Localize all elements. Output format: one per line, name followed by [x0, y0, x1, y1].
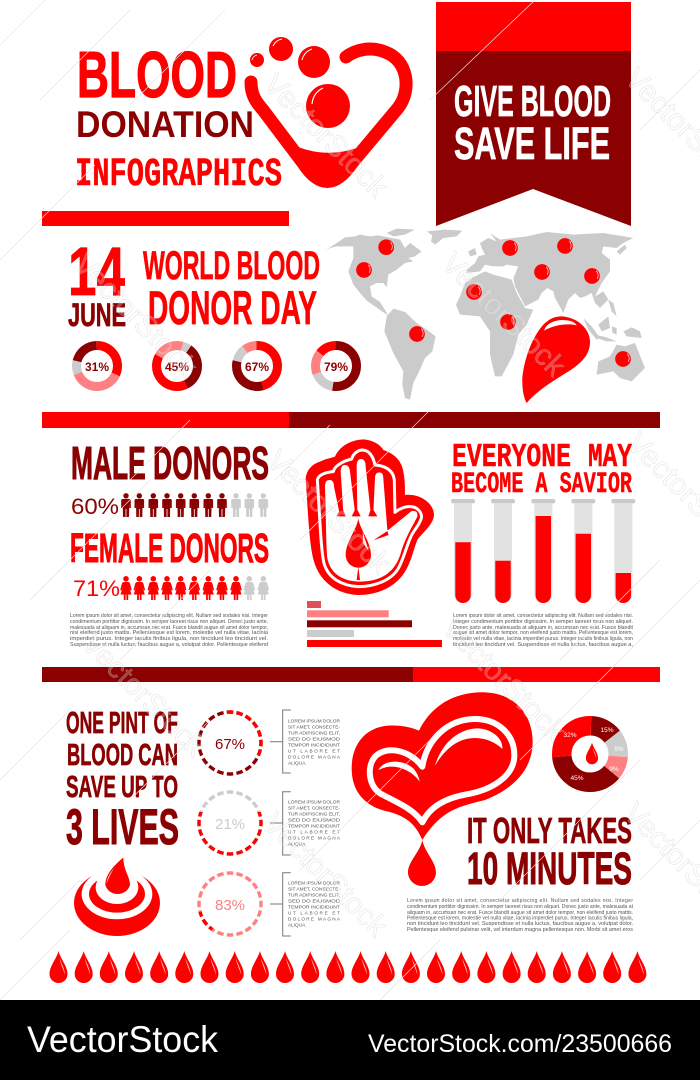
heading: world blood donor day: DONOR DAY: [148, 281, 317, 334]
icon: large heart with falling drop: [352, 692, 533, 886]
pie chart: 32% 15% 9% 9% 45%: 9%: [609, 766, 619, 773]
donut label: 79%: 79%: [324, 360, 348, 374]
donut label: 45%: 45%: [165, 360, 189, 374]
title: blood donation infographics: INFOGRAPHICS: [75, 153, 282, 198]
bracket text: third note: ALIQUA.: [288, 922, 306, 927]
pie chart: 32% 15% 9% 9% 45%: 32%: [563, 732, 577, 739]
footer: vectorstock credit: [0, 1000, 700, 1080]
bracket text: first note: ALIQUA.: [288, 760, 306, 765]
bracket text: first note: [270, 710, 341, 773]
icon: heart with blood bubbles: [250, 37, 406, 188]
bracket text: second note: ALIQUA.: [288, 841, 306, 846]
title: blood donation infographics: [75, 38, 282, 198]
icon: hand with blood drop: [306, 439, 434, 595]
text block: minutes lorem ipsum: [407, 898, 634, 933]
world map with pins: [325, 229, 645, 400]
text block: savior lorem ipsum: tincidunt leo tincidunt vel. Suspendisse et nulla luctus, faucibus augue a,: [453, 642, 633, 648]
bracket text: first note: LOREM IPSUM DOLOR: [288, 718, 341, 723]
divider bar: middle: [42, 412, 660, 428]
text: VectorStock: [67, 248, 204, 385]
text block: minutes lorem ipsum: Pellentesque eleifend pulvinar velit, vel interdum magna pellentesque non. Morbi sit amet eros: [407, 927, 634, 933]
text block: donors lorem ipsum: malesuada at aliquam in, accumsan nec erat. Fusce blandit augue sit amet dolor tempor,: [70, 625, 268, 631]
bracket text: second note: [270, 792, 341, 855]
heading: everyone may become a savior: [451, 439, 632, 502]
bracket text: third note: SED DO EIUSMOD: [288, 898, 341, 903]
bracket text: first note: SED DO EIUSMOD: [288, 736, 341, 741]
text: VectorStock: [435, 612, 572, 749]
text block: donors lorem ipsum: [70, 613, 268, 648]
progress ring: 21%: [199, 792, 261, 854]
chart: test tubes: [451, 499, 635, 603]
progress ring: 67%: [199, 712, 261, 774]
progress ring: 83%: 83%: [215, 897, 245, 914]
heading: everyone may become a savior: EVERYONE: [452, 439, 571, 476]
divider bar: top: [42, 211, 289, 226]
bracket text: second note: UT LABORE ET: [288, 829, 340, 834]
donut chart: 67%: [236, 346, 278, 386]
bracket text: first note: TEMPOR INCIDIDUNT: [288, 742, 340, 747]
heading: one pint of blood can save up to 3 lives: 3 LIVES: [66, 799, 179, 855]
bracket text: third note: DOLORE MAGNA: [288, 916, 341, 921]
icon: blood drop with ripples: [74, 857, 160, 936]
text block: donors lorem ipsum: imperdiet purus. Integer iaculis finibus ligula, non tincidunt leo tincidunt vel.: [70, 636, 268, 642]
text block: savior lorem ipsum: Lorem ipsum dolor sit amet, consectetur adipiscing elit. Nullam sed sodales nisi.: [453, 613, 633, 619]
ribbon banner: give blood save life: [436, 2, 631, 226]
heading: one pint of blood can save up to 3 lives: SAVE UP TO: [66, 769, 178, 804]
bracket text: second note: TUR ADIPISCING ELIT,: [288, 811, 340, 816]
heading: it only takes 10 minutes: [467, 810, 632, 894]
heading: one pint of blood can save up to 3 lives: BLOOD CAN: [67, 737, 178, 772]
heading: world blood donor day: [143, 244, 320, 334]
pie chart: 32% 15% 9% 9% 45%: 45%: [570, 775, 584, 782]
bracket text: second note: SIT AMET, CONSECTE-: [288, 805, 340, 810]
text: VectorStock: [257, 68, 394, 205]
bracket text: first note: TUR ADIPISCING ELIT,: [288, 730, 340, 735]
bracket text: third note: TUR ADIPISCING ELIT,: [288, 892, 340, 897]
divider bar: lower: [42, 667, 660, 682]
text: VectorStock: [75, 627, 212, 764]
title: blood donation infographics: BLOOD: [77, 38, 237, 111]
text block: minutes lorem ipsum: aliquam in, accumsan nec erat. Fusce blandit augue sit amet dolor tempor, non eleifend justo mattis.: [407, 910, 633, 916]
text block: donors lorem ipsum: nisi eleifend justo mattis. Pellentesque est lorem, molestie vel nulla vitae, lacinia: [70, 630, 268, 636]
text: VectorStock: [435, 247, 572, 384]
bracket text: third note: SIT AMET, CONSECTE-: [288, 886, 340, 891]
donut chart: 31%: [76, 346, 118, 386]
ribbon banner: give blood save life: SAVE LIFE: [454, 118, 610, 169]
pie chart: 32% 15% 9% 9% 45%: [562, 726, 624, 782]
footer: vectorstock credit: VectorStock.com/23500666: [368, 1030, 672, 1058]
bracket text: first note: SIT AMET, CONSECTE-: [288, 724, 340, 729]
bracket text: second note: SED DO EIUSMOD: [288, 817, 341, 822]
text block: savior lorem ipsum: augue sit amet dolor tempor, non eleifend justo mattis. Pellentesque est lorem,: [453, 630, 633, 636]
progress ring: 21%: 21%: [215, 816, 245, 833]
pie chart: 32% 15% 9% 9% 45%: 9%: [614, 746, 624, 753]
date: 14 june: [68, 233, 126, 333]
bracket text: third note: TEMPOR INCIDIDUNT: [288, 904, 340, 909]
text block: savior lorem ipsum: [453, 613, 634, 648]
heading: world blood donor day: WORLD BLOOD: [143, 244, 320, 288]
bracket text: third note: LOREM IPSUM DOLOR: [288, 880, 341, 885]
text block: donors lorem ipsum: Lorem ipsum dolor sit amet, consectetur adipiscing elit. Nullam sed sodales nisi. Integer: [70, 613, 268, 619]
text block: minutes lorem ipsum: Lorem ipsum dolor sit amet, consectetur adipiscing elit. Nullam sed sodales nisi. Integer: [407, 898, 633, 904]
donut chart: 79%: [316, 346, 356, 386]
panel: female donors: FEMALE DONORS: [70, 525, 269, 571]
progress ring: 67%: 67%: [215, 736, 245, 753]
bracket text: second note: DOLORE MAGNA: [288, 835, 341, 840]
bracket text: first note: DOLORE MAGNA: [288, 754, 341, 759]
heading: one pint of blood can save up to 3 lives: ONE PINT OF: [66, 705, 178, 740]
text: VectorStock: [257, 807, 394, 944]
bracket text: second note: LOREM IPSUM DOLOR: [288, 799, 341, 804]
text block: savior lorem ipsum: molestie vel nulla vitae, lacinia imperdiet purus. Integer iaculis finibus ligula, non: [453, 636, 633, 642]
bracket text: third note: UT LABORE ET: [288, 910, 340, 915]
bracket text: second note: TEMPOR INCIDIDUNT: [288, 823, 340, 828]
text block: donors lorem ipsum: condimentum porttitor dignissim. In semper laoreet risus non aliquet. Donec justo ante,: [70, 619, 268, 625]
donut label: 67%: 67%: [245, 360, 269, 374]
panel: male donors: 60%: [71, 494, 119, 519]
bar chart: horizontal bars: [307, 601, 442, 647]
heading: one pint of blood can save up to 3 lives: [66, 705, 179, 855]
text block: savior lorem ipsum: Donec justo ante, malesuada at aliquam in, accumsan nec erat. Fusce blandit: [453, 625, 634, 631]
text block: savior lorem ipsum: Integer condimentum porttitor dignissim. In semper laoreet risus non aliquet.: [453, 619, 633, 625]
donut label: 31%: 31%: [85, 360, 109, 374]
text block: minutes lorem ipsum: condimentum porttitor dignissim. In semper laoreet risus non aliquet. Donec justo ante, malesuada at: [407, 904, 634, 910]
text: VectorStock: [260, 444, 397, 581]
text block: minutes lorem ipsum: Pellentesque est lorem, molestie vel nulla vitae, lacinia imperdiet purus. Integer iaculis finibus ligula,: [407, 916, 633, 922]
donut chart: 45%: [156, 346, 198, 386]
icon: large blood drop on map: [522, 316, 590, 403]
date: 14 june: 14: [68, 233, 125, 310]
panel: male donors: MALE DONORS: [71, 437, 269, 489]
text block: minutes lorem ipsum: non tincidunt leo tincidunt vel. Suspendisse et nulla luctus, faucibus augue a, volutpat dolor.: [407, 921, 633, 927]
title: blood donation infographics: DONATION: [76, 104, 254, 145]
panel: female donors: 71%: [73, 576, 120, 601]
footer: vectorstock credit: VectorStock: [27, 1019, 218, 1060]
panel: male donors: [71, 437, 269, 519]
date: 14 june: JUNE: [68, 297, 126, 333]
bracket text: first note: UT LABORE ET: [288, 748, 340, 753]
text block: donors lorem ipsum: Suspendisse et nulla luctus, faucibus augue a, volutpat dolor. Pellentesque eleifend: [70, 642, 268, 648]
heading: everyone may become a savior: MAY: [588, 439, 632, 476]
progress ring: 83%: [199, 873, 261, 935]
bracket text: third note: [270, 873, 341, 936]
pie chart: 32% 15% 9% 9% 45%: 15%: [600, 727, 614, 734]
panel: female donors: [70, 525, 269, 601]
row of blood drops: [50, 951, 646, 983]
